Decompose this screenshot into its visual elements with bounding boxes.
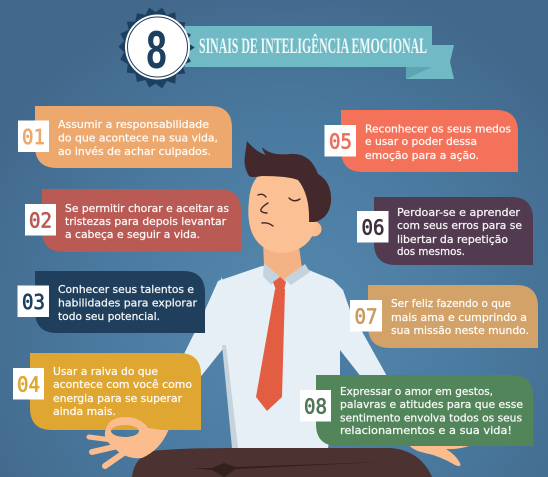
hair bbox=[244, 141, 331, 222]
number 07 bbox=[350, 300, 382, 332]
number 06 bbox=[357, 211, 388, 242]
mouth bbox=[262, 223, 273, 226]
ribbon main bbox=[185, 26, 432, 67]
panel: sign 03: todo seu potencial. bbox=[58, 311, 160, 323]
text 02: Se permitir chorar e aceitar as bbox=[65, 203, 229, 215]
panel: sign 02: a cabeça e seguir a vida. bbox=[65, 229, 200, 241]
number 05 bbox=[324, 125, 356, 156]
panel: sign 02 bbox=[25, 189, 241, 252]
panel: sign 06: com seus erros para se bbox=[397, 220, 522, 232]
gap between right arm and torso bbox=[340, 350, 362, 378]
panel: sign 07: mais ama e cumprindo a bbox=[391, 312, 527, 324]
panel: sign 03: habilidades para explorar bbox=[58, 298, 198, 310]
panel: sign 04: energia para se superar bbox=[53, 393, 183, 405]
ribbon tail bbox=[406, 45, 454, 79]
panel: sign 05: 05 bbox=[329, 130, 352, 154]
panel: sign 01: do que acontece na sua vida, bbox=[58, 132, 218, 144]
panel: sign 05: e usar o poder dessa bbox=[365, 136, 477, 148]
fingers bbox=[89, 437, 128, 466]
closed eyes bbox=[258, 194, 300, 226]
number 01 bbox=[18, 120, 49, 152]
panel: sign 06 bbox=[357, 197, 533, 265]
right hand bbox=[405, 440, 472, 466]
panel: sign 08: 08 bbox=[304, 394, 327, 418]
tie bbox=[256, 277, 286, 411]
panel: sign 07: sua missão neste mundo. bbox=[391, 325, 529, 337]
left arm sleeve bbox=[180, 277, 226, 400]
panel: sign 01 bbox=[18, 106, 232, 168]
text 07: Ser feliz fazendo o que bbox=[391, 298, 511, 310]
panel: sign 02: tristezas para depois levantar bbox=[65, 216, 227, 228]
left forearm bbox=[145, 400, 190, 435]
text 08: Expressar o amor em gestos, bbox=[340, 386, 493, 398]
panel: sign 06: libertar da repetição bbox=[397, 234, 508, 246]
panel: sign 03: 03 bbox=[22, 290, 45, 314]
number 08 bbox=[300, 390, 331, 422]
panel: sign 04 bbox=[13, 353, 201, 430]
panel: sign 04: 04 bbox=[17, 372, 40, 396]
panel: sign 03 bbox=[18, 271, 205, 333]
number 02 bbox=[25, 204, 56, 236]
title banner bbox=[118, 8, 454, 88]
right arm sleeve bbox=[306, 269, 388, 440]
panel: sign 08: relacionamentos e a sua vida! bbox=[340, 425, 512, 437]
panel: sign 07: 07 bbox=[354, 304, 378, 328]
panel: sign 08 bbox=[300, 375, 533, 446]
text 03: Conhecer seus talentos e bbox=[58, 284, 194, 296]
number 03 bbox=[18, 286, 49, 317]
panel: sign 05 bbox=[324, 110, 518, 172]
text 05: Reconhecer os seus medos bbox=[365, 124, 511, 136]
trousers bbox=[132, 448, 432, 477]
neck bbox=[263, 240, 302, 284]
panel: sign 08: sentimento envolva todos os seus bbox=[340, 412, 522, 424]
text 06: Perdoar-se e aprender bbox=[397, 207, 521, 219]
man meditating bbox=[132, 141, 472, 477]
badge number: 8 bbox=[146, 21, 168, 85]
ear bbox=[306, 222, 322, 236]
badge bbox=[118, 8, 195, 88]
nose bbox=[261, 203, 268, 213]
left hand bbox=[89, 417, 168, 466]
panel: sign 06: 06 bbox=[362, 216, 384, 240]
panel: sign 01: ao invés de achar culpados. bbox=[58, 146, 211, 158]
trouser creases bbox=[193, 462, 383, 477]
panel: sign 05: emoção para a ação. bbox=[365, 150, 479, 162]
face bbox=[248, 172, 316, 253]
panel: sign 04: ainda mais. bbox=[53, 406, 116, 418]
panel: sign 02: 02 bbox=[29, 208, 52, 232]
panel: sign 07 bbox=[350, 285, 538, 348]
text 04: Usar a raiva do que bbox=[53, 366, 158, 378]
panel: sign 01: 01 bbox=[22, 125, 45, 149]
torso shirt bbox=[205, 266, 340, 448]
number 04 bbox=[13, 368, 44, 400]
torso shadow bbox=[222, 345, 238, 448]
collar bbox=[263, 263, 310, 285]
panel: sign 04: acontece com você como bbox=[53, 379, 192, 391]
panel: sign 08: palavras e atitudes para que esse bbox=[340, 399, 523, 411]
panel: sign 06: dos mesmos. bbox=[397, 246, 465, 258]
text 01: Assumir a responsabilidade bbox=[58, 119, 209, 131]
